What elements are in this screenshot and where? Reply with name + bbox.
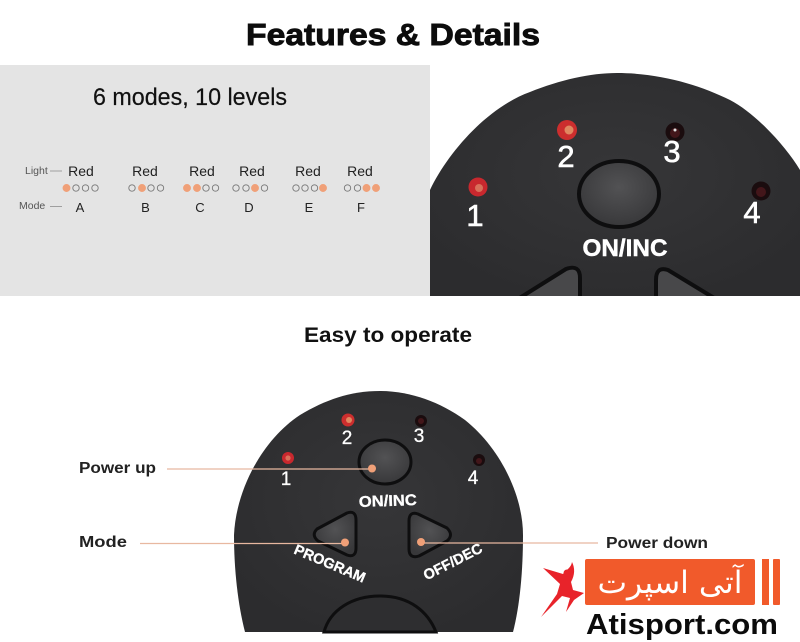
mode letters: C xyxy=(195,200,205,215)
led 1 xyxy=(282,452,294,464)
numbers: 2 xyxy=(342,428,352,449)
indicator dots xyxy=(63,184,380,192)
callout: mode xyxy=(79,534,349,551)
logo runner icon xyxy=(541,562,584,617)
triangle buttons xyxy=(510,268,724,304)
light colour labels: Red xyxy=(189,163,215,179)
panel: modes table xyxy=(0,65,430,296)
numbers: 3 xyxy=(663,134,681,169)
numbers xyxy=(466,134,761,233)
numbers: 4 xyxy=(468,468,479,489)
mode letters: B xyxy=(141,200,150,215)
led 4 xyxy=(752,182,770,200)
led 4 xyxy=(473,454,485,466)
on/inc button xyxy=(579,161,659,227)
numbers: 3 xyxy=(414,426,424,447)
numbers: 4 xyxy=(743,195,761,230)
callout: power up xyxy=(79,460,376,477)
device diagram xyxy=(234,391,523,632)
mode letters: F xyxy=(357,200,365,215)
callout: mode: Mode xyxy=(79,534,127,551)
row labels xyxy=(19,165,62,212)
callout: power down: Power down xyxy=(606,535,708,552)
panel: device close-up xyxy=(430,65,800,308)
light colour labels: Red xyxy=(295,163,321,179)
light colour labels: Red xyxy=(132,163,158,179)
off/dec label: OFF/DEC xyxy=(421,541,486,584)
logo persian text: آتی اسپرت xyxy=(598,563,744,601)
light colour labels: Red xyxy=(239,163,265,179)
led 3 xyxy=(666,122,684,142)
off/dec button xyxy=(409,513,450,557)
heading: 6 modes: 6 modes, 10 levels xyxy=(93,84,287,111)
bottom button xyxy=(324,596,436,632)
numbers: 1 xyxy=(281,469,291,490)
device body xyxy=(430,73,800,296)
heading: easy to operate: Easy to operate xyxy=(304,323,472,347)
on/inc label: ON/INC xyxy=(582,235,668,262)
on/inc button xyxy=(359,440,411,484)
numbers: 2 xyxy=(557,139,575,174)
numbers: 1 xyxy=(466,198,484,233)
mode letters: A xyxy=(76,200,85,215)
device body xyxy=(234,391,523,632)
mode letters xyxy=(76,200,365,215)
mode letters: D xyxy=(244,200,254,215)
light colour labels: Red xyxy=(347,163,373,179)
led 3 xyxy=(415,415,427,427)
numbers xyxy=(281,426,479,490)
logo url: Atisport.com xyxy=(586,609,778,641)
program label: PROGRAM xyxy=(291,542,368,587)
on/inc label: ON/INC xyxy=(359,492,417,511)
logo banner xyxy=(585,559,755,605)
title: Features & Details xyxy=(246,17,540,52)
light colour labels xyxy=(68,163,373,179)
callout: power down xyxy=(417,535,708,552)
callout: power up: Power up xyxy=(79,460,156,477)
led 2 xyxy=(342,414,354,426)
led 1 xyxy=(468,178,488,196)
led 2 xyxy=(557,120,577,140)
mode letters: E xyxy=(305,200,314,215)
row labels: Light xyxy=(25,165,48,177)
row labels: Mode xyxy=(19,200,45,212)
program button xyxy=(314,512,356,556)
logo: atisport xyxy=(541,559,780,641)
light colour labels: Red xyxy=(68,163,94,179)
